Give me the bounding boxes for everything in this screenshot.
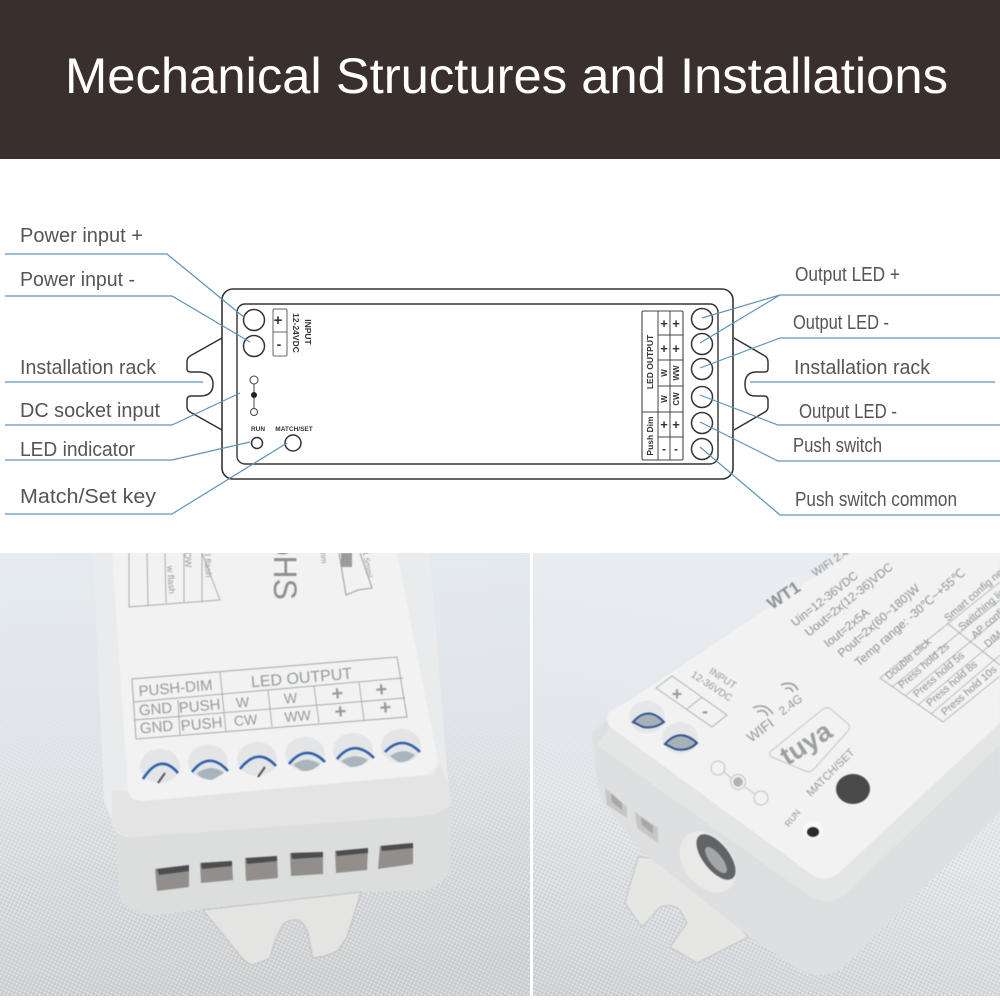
left labels: Match/Set key bbox=[20, 486, 156, 508]
input label: INPUT bbox=[707, 666, 738, 692]
right labels: Output LED + bbox=[795, 264, 900, 286]
input terminals: + bbox=[274, 312, 283, 329]
output terminal table: LED OUTPUT bbox=[645, 334, 655, 389]
input terminals: 12-24VDC bbox=[291, 313, 301, 353]
tuya badge bbox=[770, 708, 850, 772]
output terminal table: + bbox=[672, 417, 680, 432]
function table: Press hold 5s bbox=[911, 649, 967, 700]
LED output table: CW bbox=[233, 711, 259, 729]
WiFi marks: WIFI bbox=[743, 715, 777, 745]
panel: photo of input end bbox=[533, 542, 1000, 996]
specification text: Temp range: -30℃~+55℃ bbox=[852, 566, 968, 669]
right labels: Output LED - bbox=[799, 401, 897, 423]
specification text: Uout=2x(12-36)VDC bbox=[802, 560, 896, 639]
function table: Press hold 8s bbox=[924, 658, 980, 709]
title banner bbox=[0, 0, 1000, 159]
WiFi marks: 2.4G bbox=[776, 691, 805, 718]
specification text bbox=[765, 553, 966, 666]
specification text: WIFI 2.4G bbox=[810, 542, 858, 579]
function table bbox=[880, 550, 1000, 722]
RUN and MATCH/SET controls: MATCH/SET bbox=[275, 426, 313, 433]
DC polarity symbol bbox=[711, 761, 768, 805]
output terminal table: W bbox=[660, 395, 669, 403]
input label: 12-36VDC bbox=[689, 670, 734, 704]
input terminals: - bbox=[277, 336, 282, 352]
left labels: Installation rack bbox=[20, 357, 157, 379]
left labels: LED indicator bbox=[20, 439, 135, 461]
output terminal table: + bbox=[660, 316, 668, 331]
LED output table: PUSH-DIM bbox=[138, 677, 213, 700]
output terminal table: WW bbox=[672, 365, 681, 381]
LED output table: PUSH bbox=[178, 696, 221, 717]
input label bbox=[656, 666, 738, 727]
DC socket symbol bbox=[250, 376, 258, 416]
LED output table: W bbox=[283, 689, 299, 707]
wire entry holes bbox=[155, 843, 413, 891]
function table: Press hold 10s bbox=[939, 664, 999, 718]
panel: photo of output end bbox=[0, 538, 530, 996]
output terminal table: + bbox=[672, 316, 680, 331]
match/set button: MATCH/SET bbox=[804, 746, 857, 799]
device outline bbox=[187, 289, 768, 479]
LED output table: + bbox=[334, 701, 347, 723]
LED output table bbox=[132, 657, 407, 739]
WiFi marks bbox=[745, 682, 802, 742]
input terminals bbox=[244, 309, 313, 356]
output terminal table: + bbox=[660, 417, 668, 432]
LED output table: PUSH bbox=[180, 714, 223, 735]
right labels: Output LED - bbox=[793, 312, 889, 334]
run indicator: RUN bbox=[783, 807, 803, 829]
wire strip icon: 1.5mm² bbox=[361, 550, 374, 579]
right labels bbox=[793, 264, 957, 511]
input terminals: INPUT bbox=[303, 319, 313, 346]
LED output table: GND bbox=[138, 700, 173, 719]
left labels: Power input - bbox=[20, 269, 135, 291]
wire entry holes bbox=[605, 788, 658, 843]
function table: Press hold 2s bbox=[896, 640, 952, 691]
function table remnant bbox=[129, 552, 220, 607]
device body bbox=[592, 553, 1000, 975]
output terminal table: Push Dim bbox=[645, 416, 655, 456]
LED output table: + bbox=[375, 679, 388, 701]
output terminals bbox=[692, 308, 712, 460]
output terminal table: + bbox=[660, 341, 668, 356]
output terminal table bbox=[642, 311, 683, 460]
screw terminals bbox=[629, 701, 698, 754]
device body bbox=[93, 553, 452, 915]
screw terminals bbox=[140, 729, 421, 783]
LED output table: + bbox=[331, 683, 344, 705]
LED output table: + bbox=[379, 697, 392, 719]
DC jack bbox=[680, 832, 736, 892]
run indicator bbox=[784, 808, 820, 838]
function table remnant: l flash bbox=[202, 554, 214, 578]
mounting tab bbox=[625, 857, 748, 963]
panel: controller wiring diagram bbox=[5, 225, 1000, 515]
right labels: Installation rack bbox=[794, 357, 931, 379]
specification text: Uin=12-36VDC bbox=[788, 568, 861, 629]
LED output table: W bbox=[235, 693, 251, 711]
title: Mechanical Structures and Installations bbox=[65, 48, 948, 104]
output terminal table: - bbox=[662, 442, 666, 456]
input label: - bbox=[702, 701, 708, 721]
right labels: Push switch common bbox=[795, 489, 957, 511]
RoHS mark: oHS bbox=[267, 538, 303, 600]
mounting tab bbox=[203, 892, 361, 965]
LED output table: WW bbox=[284, 707, 312, 725]
LED output table: LED OUTPUT bbox=[250, 666, 353, 691]
tuya badge: tuya bbox=[774, 715, 838, 771]
specification text: Iout=2x5A bbox=[821, 605, 872, 650]
left labels: Power input + bbox=[20, 225, 143, 247]
leader lines bbox=[5, 254, 1000, 515]
specification text: Pout=2x(60~180)W bbox=[835, 581, 923, 660]
output terminal table: CW bbox=[672, 392, 681, 406]
right labels: Push switch bbox=[793, 435, 882, 457]
wire strip icon: mm bbox=[318, 550, 329, 564]
function table remnant: OW bbox=[182, 552, 194, 568]
input label: + bbox=[672, 684, 682, 704]
left labels bbox=[20, 225, 160, 508]
left labels: DC socket input bbox=[20, 400, 160, 422]
function table remnant: w flash bbox=[165, 564, 177, 594]
function table: Double click bbox=[883, 636, 934, 682]
specification text: WT1 bbox=[764, 577, 804, 613]
RUN and MATCH/SET controls: RUN bbox=[251, 426, 265, 433]
output terminal table: + bbox=[672, 341, 680, 356]
output terminal table: W bbox=[660, 369, 669, 377]
output terminal table: - bbox=[674, 442, 678, 456]
RUN and MATCH/SET controls bbox=[251, 426, 313, 451]
wire strip icon bbox=[318, 550, 374, 595]
LED output table: GND bbox=[139, 718, 174, 737]
